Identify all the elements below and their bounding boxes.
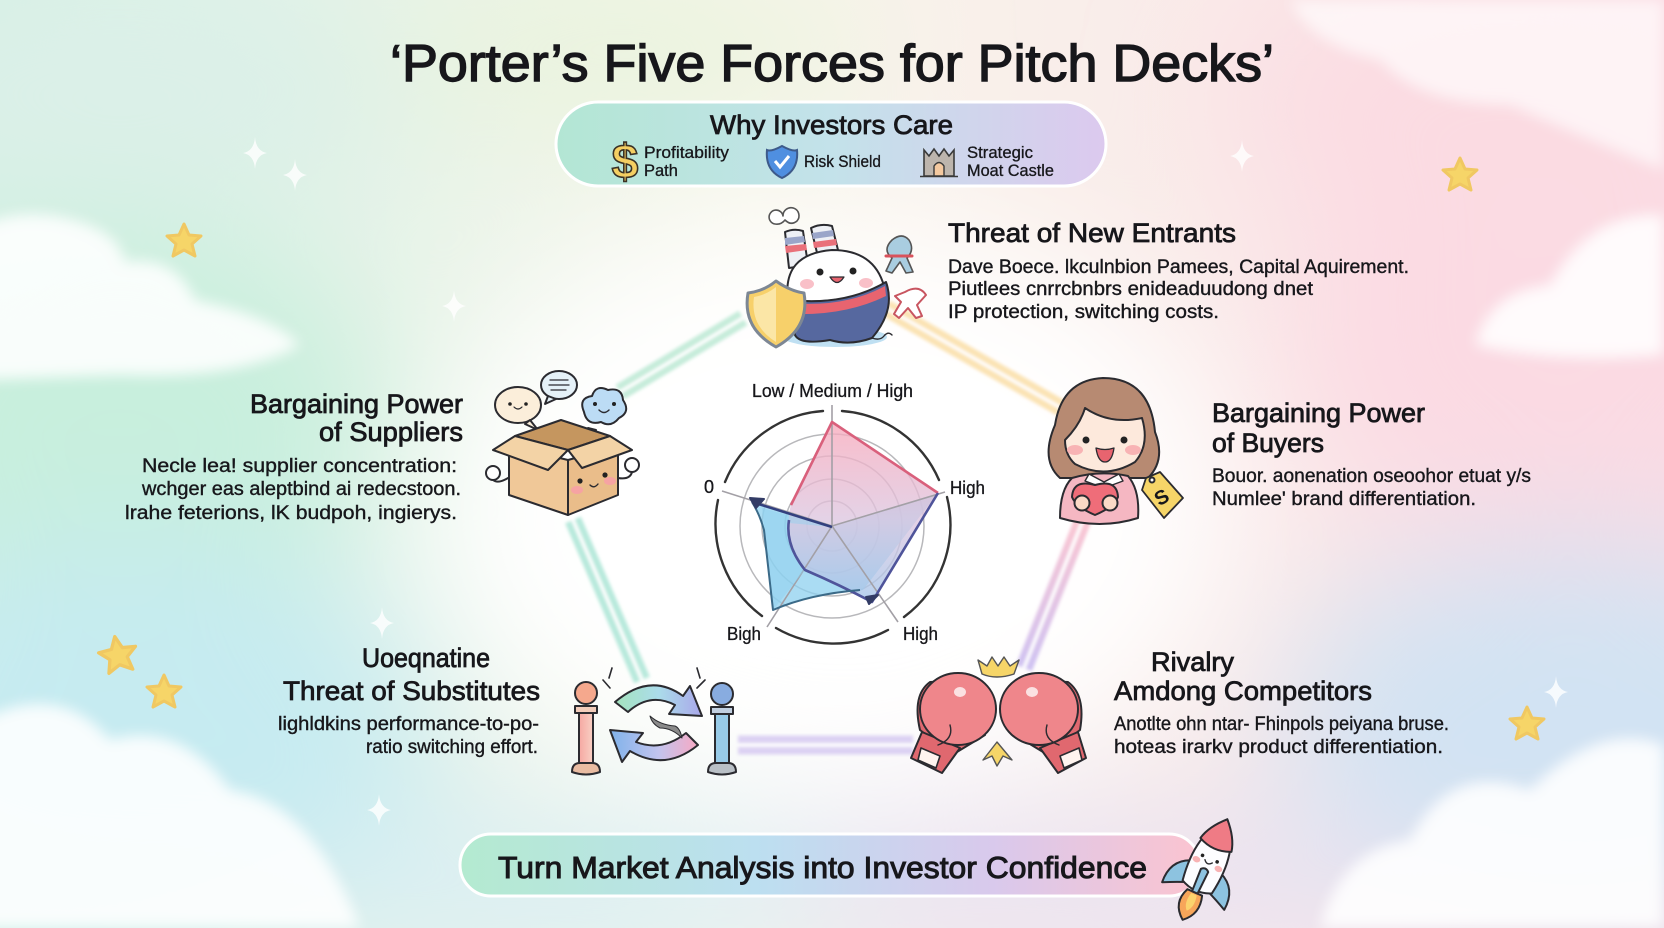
heading: bargaining power of buyers: of Buyers (1212, 428, 1324, 458)
label: strategic moat castle: Strategic (967, 144, 1033, 162)
text: buyers body: Bouor. aonenation oseoohor etuat y/s (1212, 465, 1531, 487)
label: profitability path: Profitability (644, 144, 730, 162)
panel: why investors care (556, 102, 1106, 189)
radar outlines (750, 422, 938, 610)
banner: call to action (460, 834, 1200, 896)
radar label: right axis: High (950, 478, 985, 498)
label: profitability path (644, 144, 730, 180)
heading: bargaining power of suppliers: Bargaining Power (250, 389, 463, 419)
title: ‘Porter’s Five Forces for Pitch Decks’ (390, 35, 1274, 93)
heading: bargaining power of buyers: Bargaining Power (1212, 398, 1425, 428)
icon: boxing gloves (911, 657, 1086, 773)
icon: moat castle (920, 149, 958, 176)
text: substitutes body: lighldkins performance-to-po- (278, 713, 539, 735)
icon: dollar sign: $ (612, 136, 639, 189)
heading: threat of substitutes: Uoeqnatine (362, 643, 490, 673)
stars (96, 158, 1544, 739)
text: threat of new entrants body: Piutlees cnrrcbnbrs enideaduudong dnet (948, 278, 1314, 300)
heading: why investors care: Why Investors Care (710, 110, 953, 140)
radar series: pink (788, 422, 938, 602)
icon: rocket (1151, 805, 1259, 928)
text: threat of new entrants body: IP protection, switching costs. (948, 301, 1219, 323)
icon: risk shield (767, 146, 797, 178)
heading: rivalry among competitors (1114, 647, 1372, 706)
text: rivalry body: hoteas irarkv product differentiation. (1114, 736, 1443, 758)
radar series: blue (752, 493, 938, 610)
icon: two pillars and swap arrows (572, 668, 736, 774)
heading: rivalry among competitors: Rivalry (1151, 647, 1234, 677)
banner text: Turn Market Analysis into Investor Confidence (498, 850, 1147, 885)
text: substitutes body (278, 713, 539, 758)
text: buyers body: Numlee' brand differentiation. (1212, 488, 1476, 510)
icon: cardboard box with speech bubbles (486, 371, 639, 515)
pentagon connector bands (573, 308, 1083, 745)
label: strategic moat castle (967, 144, 1054, 180)
text: buyers body (1212, 465, 1531, 510)
label: strategic moat castle: Moat Castle (967, 162, 1054, 180)
label: risk shield: Risk Shield (804, 153, 881, 171)
radar chart (704, 381, 985, 644)
heading: threat of new entrants: Threat of New Entrants (948, 218, 1236, 248)
text: rivalry body: Anotlte ohn ntar- Fhinpols peiyana bruse. (1114, 713, 1449, 735)
radar label: top axis: Low / Medium / High (752, 381, 913, 401)
radar label: left axis: 0 (704, 477, 714, 497)
label: profitability path: Path (644, 162, 678, 180)
heading: bargaining power of buyers (1212, 398, 1425, 458)
radar label: lower right axis: High (903, 624, 938, 644)
heading: threat of substitutes: Threat of Substitutes (283, 676, 540, 706)
grid rings (740, 434, 924, 618)
icon: girl with heart and price tag (1049, 378, 1183, 524)
text: rivalry body (1114, 713, 1449, 758)
radar label: lower left axis: Bigh (727, 624, 761, 644)
heading: bargaining power of suppliers (250, 389, 463, 447)
spokes (722, 405, 945, 627)
text: suppliers body: lrahe feterions, lK budpoh, ingierys. (125, 502, 457, 524)
heading: threat of substitutes (283, 643, 540, 706)
text: threat of new entrants body (948, 256, 1409, 323)
text: threat of new entrants body: Dave Boece. lkculnbion Pamees, Capital Aquirement. (948, 256, 1409, 278)
sparkles (243, 137, 1568, 826)
outer ring (716, 411, 950, 644)
text: suppliers body: wchger eas aleptbind ai redecstoon. (141, 478, 461, 500)
heading: bargaining power of suppliers: of Suppliers (319, 417, 463, 447)
text: suppliers body: Necle lea! supplier concentration: (142, 455, 457, 477)
icon: girl with heart and price tag: S (1151, 485, 1173, 511)
text: suppliers body (125, 455, 461, 524)
text: substitutes body: ratio switching effort. (366, 736, 538, 758)
icon: ship with shield (747, 208, 926, 347)
heading: rivalry among competitors: Amdong Competitors (1114, 676, 1372, 706)
